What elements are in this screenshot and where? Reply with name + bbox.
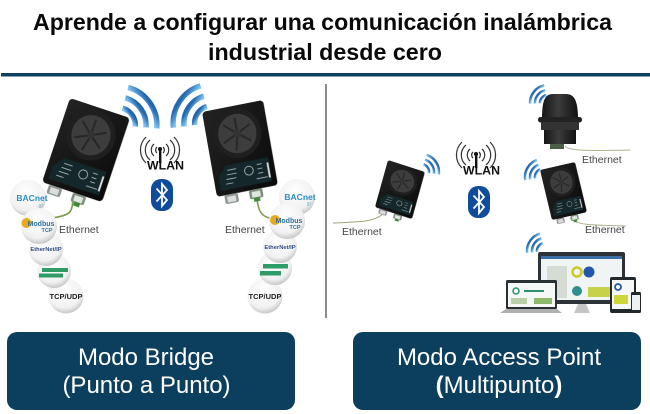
protocol: right BACnet: IP bbox=[307, 202, 312, 208]
label: access Ethernet: Ethernet bbox=[585, 224, 625, 236]
protocol: left industrial logo bbox=[37, 254, 71, 288]
icon: right wifi waves bbox=[166, 81, 214, 137]
protocol: left Modbus bbox=[21, 208, 57, 244]
protocol: left EtherNet/IP: EtherNet/IP bbox=[30, 247, 62, 253]
title: industrial desde cero bbox=[208, 39, 442, 65]
panel: modo access point button: Modo Access Point bbox=[397, 344, 601, 371]
icon: puck wifi bbox=[527, 83, 550, 108]
icon: screens wifi bbox=[524, 231, 546, 257]
protocol: left Modbus: TCP bbox=[42, 228, 53, 234]
protocol: right industrial logo bbox=[258, 251, 292, 285]
protocol: left BACnet: BACnet bbox=[16, 193, 48, 203]
title: Aprende a configurar una comunicación inalámbrica bbox=[33, 9, 613, 35]
device: right gateway bbox=[202, 100, 280, 209]
cable: right device bbox=[257, 198, 275, 219]
protocol: right TCP/UDP bbox=[248, 278, 282, 314]
label: left Ethernet: Ethernet bbox=[59, 224, 99, 236]
panel: modo access point button: (Multipunto) bbox=[436, 372, 562, 399]
protocol: left TCP/UDP: TCP/UDP bbox=[50, 292, 82, 301]
protocol: right Modbus: Modbus bbox=[276, 218, 303, 225]
protocol: right TCP/UDP: TCP/UDP bbox=[249, 292, 281, 301]
protocol: left TCP/UDP bbox=[48, 278, 84, 314]
protocol: left BACnet: IP bbox=[39, 204, 44, 210]
icon: client wifi bbox=[420, 153, 442, 179]
icon: bluetooth bbox=[151, 179, 173, 211]
panel: modo access point diagram bbox=[333, 83, 641, 313]
icon: wlan bbox=[456, 142, 500, 178]
protocol: right EtherNet/IP bbox=[263, 229, 297, 263]
cable: left device bbox=[52, 198, 73, 218]
protocol: right Modbus bbox=[269, 203, 305, 239]
device: left gateway bbox=[38, 98, 130, 214]
protocol: right BACnet: BACnet bbox=[284, 192, 316, 202]
cable: client device bbox=[333, 213, 384, 223]
panel: modo bridge button: Modo Bridge bbox=[78, 344, 214, 371]
label: client Ethernet: Ethernet bbox=[342, 226, 382, 238]
device: puck antenna bbox=[538, 94, 582, 149]
protocol: right Modbus: TCP bbox=[290, 225, 301, 231]
device: access gateway bbox=[540, 162, 589, 227]
protocol: left BACnet bbox=[10, 180, 48, 216]
icon: device wifi bbox=[522, 158, 543, 184]
device: client gateway bbox=[373, 160, 425, 226]
icon: dashboard screens bbox=[500, 252, 641, 313]
panel: modo bridge diagram bbox=[10, 81, 316, 314]
icon: left wifi waves bbox=[115, 82, 164, 138]
title bbox=[33, 9, 613, 65]
icon: wlan bbox=[140, 137, 184, 172]
cable: puck antenna bbox=[565, 146, 630, 151]
panel: modo bridge button: (Punto a Punto) bbox=[62, 372, 231, 399]
cable: access device bbox=[570, 218, 626, 226]
protocol: left EtherNet/IP bbox=[29, 232, 63, 266]
icon: bluetooth bbox=[468, 186, 490, 218]
label: puck Ethernet: Ethernet bbox=[582, 154, 622, 166]
protocol: left Modbus: Modbus bbox=[28, 221, 55, 228]
label: right Ethernet: Ethernet bbox=[225, 224, 265, 236]
protocol: right BACnet bbox=[279, 179, 316, 215]
protocol: right EtherNet/IP: EtherNet/IP bbox=[264, 245, 296, 251]
panel: modo bridge button bbox=[7, 332, 295, 410]
panel: modo access point button bbox=[353, 332, 641, 410]
